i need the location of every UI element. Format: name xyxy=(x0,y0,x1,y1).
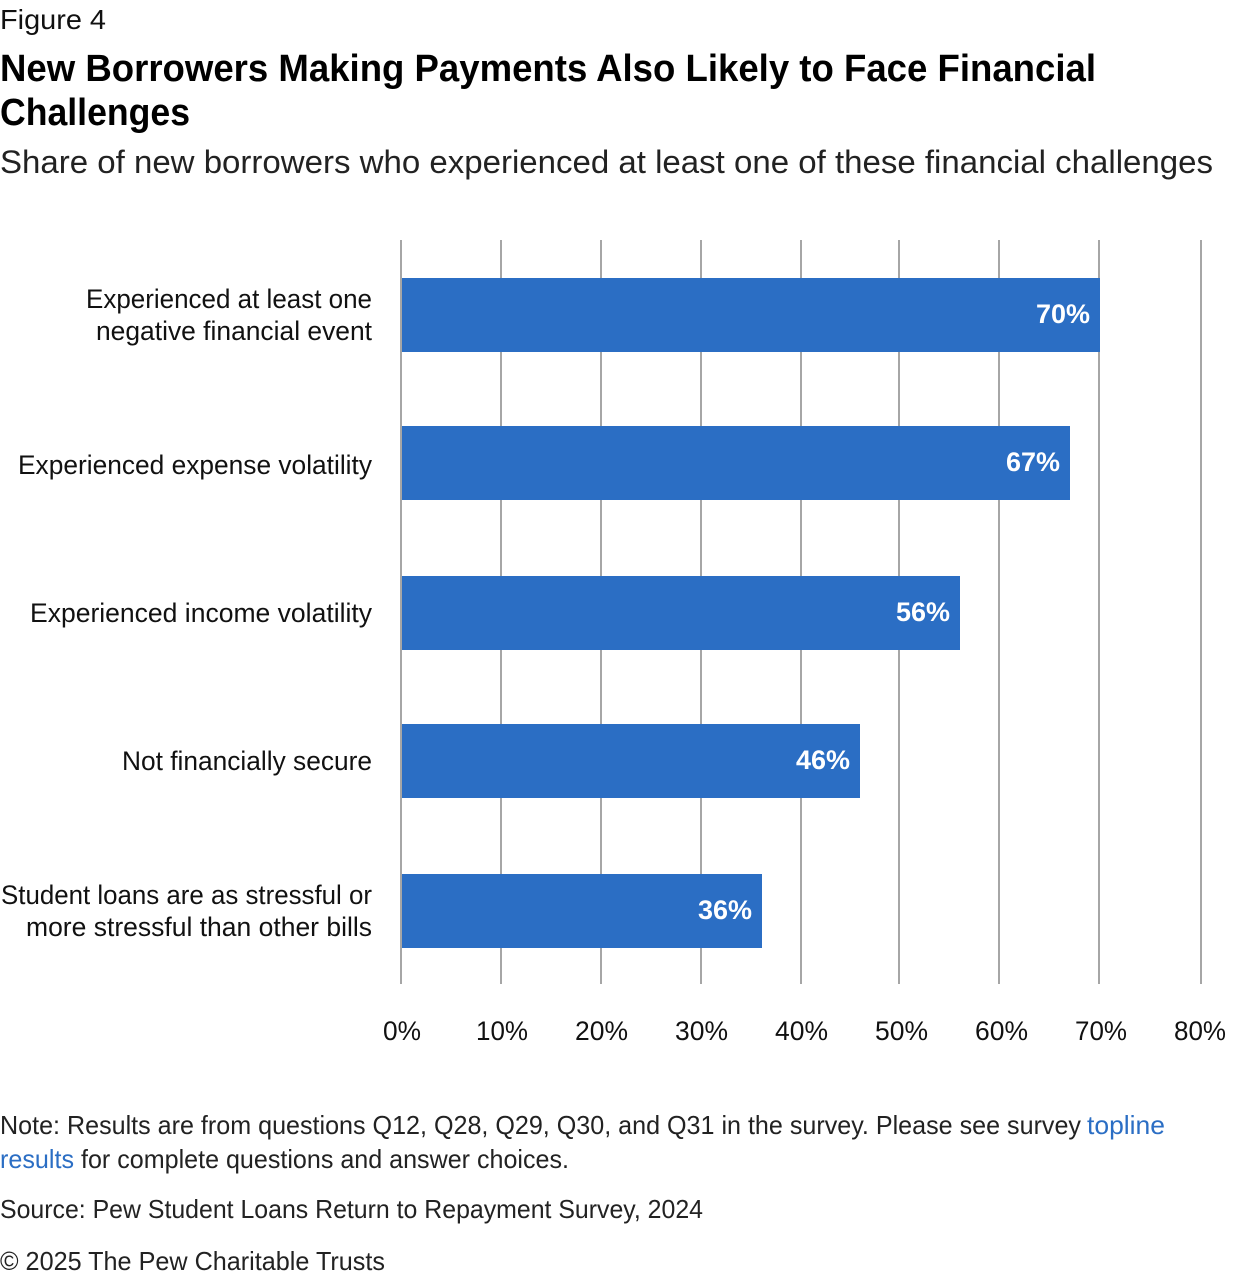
bar: negative financial event 70%: 70% xyxy=(1036,299,1090,329)
category labels: Experienced expense volatility xyxy=(18,450,372,480)
axis labels: 20% xyxy=(575,1016,628,1046)
note xyxy=(0,1110,1165,1174)
axis labels: 50% xyxy=(875,1016,928,1046)
axis labels: 0% xyxy=(383,1016,421,1046)
category labels: negative financial event xyxy=(96,316,372,346)
bar: expense volatility 67%: 67% xyxy=(1006,447,1060,477)
bar: income volatility 56% xyxy=(402,576,960,650)
note: topline xyxy=(1087,1110,1165,1140)
title: Challenges xyxy=(0,92,190,134)
copyright: © 2025 The Pew Charitable Trusts xyxy=(0,1246,385,1276)
title xyxy=(0,48,1096,134)
note: Note: Results are from questions Q12, Q28, Q29, Q30, and Q31 in the survey. Please see survey xyxy=(0,1110,1081,1140)
bar: not financially secure 46%: 46% xyxy=(796,745,850,775)
bar: expense volatility 67% xyxy=(402,426,1070,500)
bar: student loans stressful 36% xyxy=(402,874,762,948)
category labels xyxy=(1,284,372,942)
figure label: Figure 4 xyxy=(0,4,106,35)
bar: income volatility 56%: 56% xyxy=(896,597,950,627)
bar: negative financial event 70% xyxy=(402,278,1100,352)
note: results xyxy=(0,1144,74,1174)
category labels: Student loans are as stressful or xyxy=(1,880,372,910)
category labels: more stressful than other bills xyxy=(26,912,372,942)
note: for complete questions and answer choices. xyxy=(81,1144,569,1174)
axis labels: 60% xyxy=(975,1016,1028,1046)
axis labels: 10% xyxy=(476,1016,528,1046)
bar: student loans stressful 36%: 36% xyxy=(698,895,752,925)
axis labels: 30% xyxy=(675,1016,728,1046)
axis labels: 40% xyxy=(775,1016,828,1046)
bar chart xyxy=(1,240,1226,1046)
source: Source: Pew Student Loans Return to Repayment Survey, 2024 xyxy=(0,1194,703,1224)
axis labels xyxy=(383,1016,1226,1046)
bar: not financially secure 46% xyxy=(402,724,860,798)
category labels: Not financially secure xyxy=(122,746,372,776)
category labels: Experienced income volatility xyxy=(30,598,372,628)
subtitle: Share of new borrowers who experienced at least one of these financial challenges xyxy=(0,144,1213,180)
axis labels: 70% xyxy=(1075,1016,1127,1046)
title: New Borrowers Making Payments Also Likely to Face Financial xyxy=(0,48,1096,90)
category labels: Experienced at least one xyxy=(86,284,372,314)
axis labels: 80% xyxy=(1174,1016,1226,1046)
